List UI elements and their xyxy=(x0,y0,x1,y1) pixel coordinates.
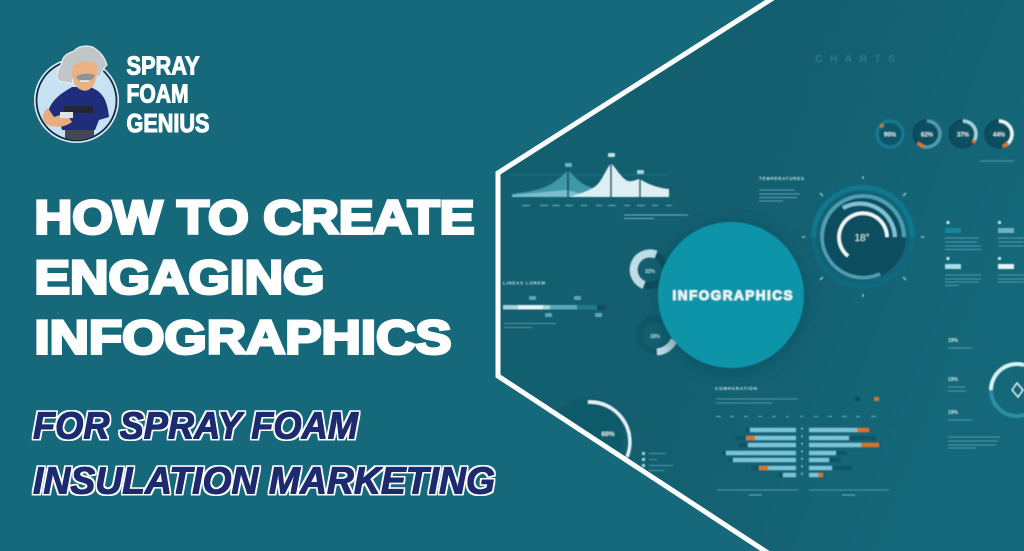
logo mascot badge xyxy=(34,46,119,143)
central circle shadow xyxy=(655,222,807,374)
comparison bar chart xyxy=(715,386,889,495)
timeline: lineas lorem: LINEAS LOREM xyxy=(503,280,545,286)
heading: charts: CHARTS xyxy=(815,53,895,65)
text block: temperatures xyxy=(759,176,804,201)
donut: upper left: 32% xyxy=(645,269,656,275)
stats list with ring: 19% xyxy=(948,377,959,383)
title: INFOGRAPHICS xyxy=(34,312,452,364)
donut: lower left: 18% xyxy=(650,334,661,340)
timeline: lineas lorem xyxy=(503,280,606,328)
donut: upper left xyxy=(634,253,666,286)
hexagon outline xyxy=(498,0,773,551)
subtitle xyxy=(33,406,495,502)
donut row: percentages: 62% xyxy=(921,132,934,138)
stats list with ring: 19% xyxy=(948,338,959,344)
stats list with ring xyxy=(948,338,1024,448)
central circle: infographics xyxy=(658,222,804,368)
comparison bar chart: COMPARATION xyxy=(715,386,757,391)
gauge: 60 percent xyxy=(552,397,673,470)
donut row: percentages: 90% xyxy=(884,132,897,138)
title: HOW TO CREATE xyxy=(34,192,474,244)
gauge: 60 percent: 60% xyxy=(601,431,615,438)
text block: temperatures: TEMPERATURES xyxy=(759,176,804,181)
radial gauge: temperature: 18° xyxy=(854,233,870,244)
logo wordmark: SPRAY xyxy=(126,50,200,80)
area chart xyxy=(510,153,688,218)
title xyxy=(34,192,474,364)
subtitle: FOR SPRAY FOAM xyxy=(33,406,359,448)
subtitle: INSULATION MARKETING xyxy=(33,460,495,502)
title: ENGAGING xyxy=(34,252,324,304)
radial gauge: temperature xyxy=(802,176,924,297)
logo: spray foam genius xyxy=(34,46,210,143)
donut row: percentages xyxy=(877,121,1014,161)
logo wordmark: FOAM xyxy=(126,78,188,108)
logo wordmark xyxy=(126,50,210,138)
logo wordmark: GENIUS xyxy=(126,108,210,138)
donut row: percentages: 44% xyxy=(993,132,1006,138)
panel: infographic preview xyxy=(490,0,1024,551)
legend cards xyxy=(945,221,1024,286)
donut: lower left xyxy=(639,319,674,352)
donut row: percentages: 37% xyxy=(957,132,970,138)
stats list with ring: 19% xyxy=(948,410,959,416)
central circle: infographics: INFOGRAPHICS xyxy=(672,288,792,303)
